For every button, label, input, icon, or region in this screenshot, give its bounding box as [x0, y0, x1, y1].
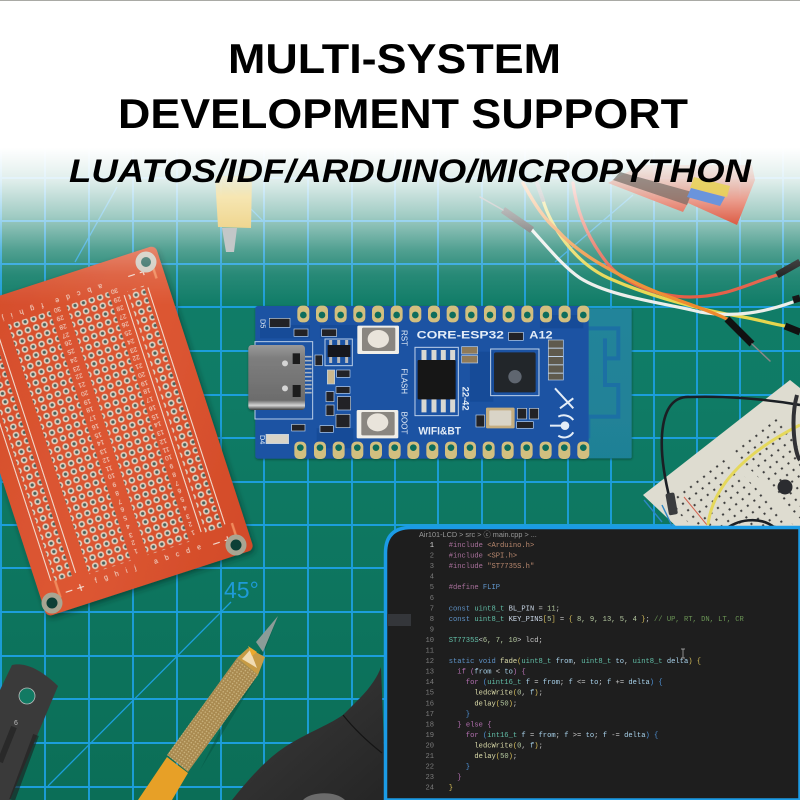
active line highlight	[387, 614, 411, 626]
row numbers right: 3	[184, 512, 190, 520]
column letters: a b c d e	[153, 543, 205, 566]
source code: #include <Arduino.h>	[449, 542, 534, 550]
line numbers: 16	[425, 700, 434, 708]
row numbers left: 24	[69, 355, 78, 364]
line numbers: 6	[430, 595, 434, 603]
line numbers: 21	[425, 753, 434, 761]
yellow wire on breadboard	[708, 425, 800, 525]
column letters: f g h i j	[94, 564, 140, 585]
line numbers: 24	[425, 785, 434, 793]
source code: ledcWrite(0, f);	[474, 690, 543, 698]
source code: ledcWrite(0, f);	[474, 742, 543, 750]
row numbers right: 19	[139, 378, 149, 387]
yellow tube connector	[215, 176, 252, 252]
silkscreen labels: FLASH	[400, 368, 409, 394]
row numbers right: 25	[123, 328, 132, 337]
boot button	[357, 410, 398, 438]
breadboard component	[778, 480, 792, 494]
line numbers: 5	[430, 584, 434, 592]
row numbers left: 19	[82, 397, 92, 406]
metal ruler, bottom left: 6	[14, 720, 18, 727]
source code: delay(50);	[474, 753, 517, 761]
line numbers: 14	[425, 679, 434, 687]
line numbers: 17	[425, 711, 434, 719]
line numbers: 4	[430, 574, 434, 582]
source code: delay(50);	[474, 700, 517, 708]
pins	[480, 197, 770, 361]
row numbers right: 20	[137, 370, 146, 379]
jumper wires	[480, 183, 800, 361]
rail plus minus marks: − +	[210, 530, 234, 552]
row numbers left: 13	[98, 446, 108, 455]
craft knife	[138, 616, 278, 800]
rail plus minus marks	[0, 262, 236, 600]
source code: #include "ST7735S.h"	[449, 563, 534, 571]
row numbers left: 21	[77, 380, 86, 389]
row numbers left: 29	[55, 313, 64, 322]
silkscreen labels: CORE-ESP32	[417, 330, 504, 342]
wifi symbol	[550, 388, 573, 437]
bottom castellated pads	[294, 442, 589, 459]
silkscreen labels: D5	[259, 319, 268, 328]
line numbers: 1	[430, 542, 434, 550]
row numbers left: 20	[80, 388, 89, 397]
line numbers: 23	[425, 774, 434, 782]
row numbers right: 22	[131, 353, 140, 362]
row numbers right: 5	[179, 495, 185, 503]
yellow wire	[543, 200, 785, 326]
code editor panel	[386, 528, 800, 800]
line numbers: 9	[430, 626, 434, 634]
silkscreen rail lines	[0, 287, 225, 581]
row numbers left: 30	[52, 305, 62, 314]
source code: }	[466, 711, 470, 719]
black wire on breadboard	[662, 397, 800, 500]
row numbers left: 7	[116, 497, 122, 505]
row numbers right: 2	[187, 520, 193, 528]
title line 2: DEVELOPMENT SUPPORT	[118, 90, 688, 137]
plugs	[503, 210, 800, 344]
source code: }	[457, 774, 462, 782]
row numbers left: 10	[106, 471, 116, 480]
row numbers right: 23	[129, 345, 138, 354]
silkscreen labels: BOOT	[400, 412, 409, 434]
source code: for (uint16_t f = from; f <= to; f += delta) {	[466, 679, 663, 687]
source code: const uint8_t BL_PIN = 11;	[449, 605, 560, 613]
ESP32 development board	[248, 306, 632, 459]
breadboard, bottom right	[643, 380, 800, 530]
source code: }	[466, 764, 470, 772]
row numbers right	[109, 286, 197, 537]
row numbers right: 27	[118, 312, 127, 321]
pad through holes	[297, 312, 587, 451]
row numbers right: 24	[126, 337, 135, 346]
row numbers right: 8	[171, 470, 177, 478]
line numbers: 15	[425, 690, 434, 698]
row numbers left: 4	[124, 522, 130, 530]
silkscreen labels: WIFI&BT	[418, 425, 461, 437]
flash memory chip	[415, 347, 458, 416]
line numbers: 13	[425, 669, 434, 677]
row numbers right: 28	[115, 303, 124, 312]
subtitle: LUATOS/IDF/ARDUINO/MICROPYTHON	[69, 153, 752, 189]
row numbers left: 26	[63, 338, 73, 347]
red wire	[573, 183, 777, 297]
row numbers left: 11	[104, 464, 113, 472]
crystal oscillator	[486, 408, 515, 428]
silkscreen labels	[258, 319, 553, 444]
row numbers right: 17	[145, 395, 154, 404]
source code: } else {	[457, 721, 492, 729]
thin top strip	[0, 0, 800, 1]
text cursor	[681, 649, 685, 658]
row numbers right: 9	[168, 462, 174, 470]
row numbers left: 6	[119, 505, 125, 513]
row numbers left: 27	[61, 330, 70, 339]
line numbers	[425, 542, 434, 793]
silkscreen labels: RST	[400, 330, 409, 346]
line numbers: 20	[425, 742, 434, 750]
trace shading	[260, 315, 583, 448]
row numbers right: 18	[142, 386, 151, 395]
rail plus minus marks: − +	[125, 262, 149, 284]
row numbers left: 28	[58, 322, 67, 331]
row numbers right: 12	[158, 436, 168, 445]
source code: #define FLIP	[449, 584, 500, 592]
row numbers left: 15	[93, 430, 103, 439]
line numbers: 12	[425, 658, 434, 666]
metal ruler, bottom left	[0, 664, 58, 800]
title line 1: MULTI-SYSTEM	[228, 35, 561, 82]
row numbers left: 14	[96, 438, 105, 447]
line numbers: 18	[425, 721, 434, 729]
source code: ST7735S<6, 7, 10> lcd;	[449, 637, 543, 645]
row numbers right: 4	[182, 504, 188, 511]
white fade overlay	[0, 0, 800, 305]
source code: static void fade(uint8_t from, uint8_t to, uint8_t delta) {	[449, 658, 701, 666]
row numbers left	[52, 305, 140, 555]
line numbers: 3	[430, 563, 434, 571]
silkscreen labels: D4	[258, 435, 267, 444]
breadcrumb: Air101-LCD > src > ⓒ main.cpp > ...	[419, 530, 537, 539]
top castellated pads	[297, 306, 589, 322]
row numbers right: 7	[174, 479, 179, 487]
column letters: a b c d e	[51, 282, 103, 305]
source code: const uint8_t KEY_PINS[5] = { 8, 9, 13, 5, 4 }; // UP, RT, DN, LT, CR	[449, 616, 745, 624]
row numbers right: 13	[155, 428, 165, 437]
line numbers: 22	[425, 764, 434, 772]
row numbers right: 16	[147, 403, 157, 412]
row numbers right: 29	[112, 295, 122, 304]
line numbers: 8	[430, 616, 434, 624]
reset button	[357, 326, 399, 354]
red perfboard prototype PCB	[0, 245, 254, 617]
row numbers right: 10	[163, 453, 173, 462]
small passive components	[266, 318, 563, 444]
row numbers left: 17	[88, 413, 97, 422]
orange wire	[523, 183, 727, 319]
perfboard hole fields	[0, 281, 223, 585]
row numbers right: 26	[120, 319, 130, 328]
row numbers left: 1	[133, 547, 138, 555]
line numbers: 19	[425, 732, 434, 740]
row numbers left: 12	[101, 455, 111, 464]
line numbers: 7	[430, 605, 434, 613]
silkscreen labels: 22-42	[461, 387, 471, 411]
voltage regulator	[325, 339, 352, 366]
white wire	[532, 230, 793, 314]
line numbers: 10	[425, 637, 434, 645]
line numbers: 2	[430, 553, 434, 561]
red shield board, top right	[608, 165, 755, 225]
ESP32 main chip	[491, 349, 539, 396]
row numbers right: 1	[190, 528, 196, 536]
source code	[449, 542, 745, 793]
row numbers left: 9	[111, 480, 117, 488]
rotary tool handle	[232, 667, 386, 800]
perfboard mounting holes	[42, 252, 246, 614]
row numbers left: 18	[85, 405, 94, 414]
row numbers left: 3	[127, 531, 133, 539]
row numbers left: 25	[66, 346, 75, 356]
row numbers right: 11	[161, 445, 170, 454]
row numbers left: 16	[90, 422, 100, 431]
row numbers right: 14	[153, 419, 162, 428]
PCB body	[255, 306, 589, 459]
source code: for (int16_t f = from; f >= to; f -= delta) {	[466, 732, 658, 740]
row numbers left: 5	[122, 513, 128, 521]
row numbers right: 30	[109, 286, 119, 295]
mat label: 45 degrees: 45°	[224, 577, 259, 603]
source code: if (from < to) {	[457, 669, 526, 677]
row numbers left: 23	[71, 364, 81, 373]
column letters	[0, 277, 205, 588]
line numbers: 11	[425, 648, 434, 656]
row numbers left: 8	[114, 489, 120, 497]
silkscreen labels: A12	[529, 330, 553, 342]
row numbers right: 21	[134, 361, 143, 370]
USB-C connector	[248, 342, 313, 419]
antenna area	[573, 308, 632, 458]
rail plus minus marks: − +	[63, 578, 87, 600]
source code: #include <SPI.h>	[449, 553, 517, 561]
row numbers left: 2	[130, 538, 136, 546]
row numbers right: 15	[150, 412, 160, 421]
row numbers right: 6	[176, 486, 182, 494]
grey wire end	[537, 183, 543, 200]
title	[69, 35, 752, 189]
source code: }	[449, 785, 453, 793]
rail traces	[0, 263, 241, 598]
row numbers left: 22	[74, 371, 83, 380]
